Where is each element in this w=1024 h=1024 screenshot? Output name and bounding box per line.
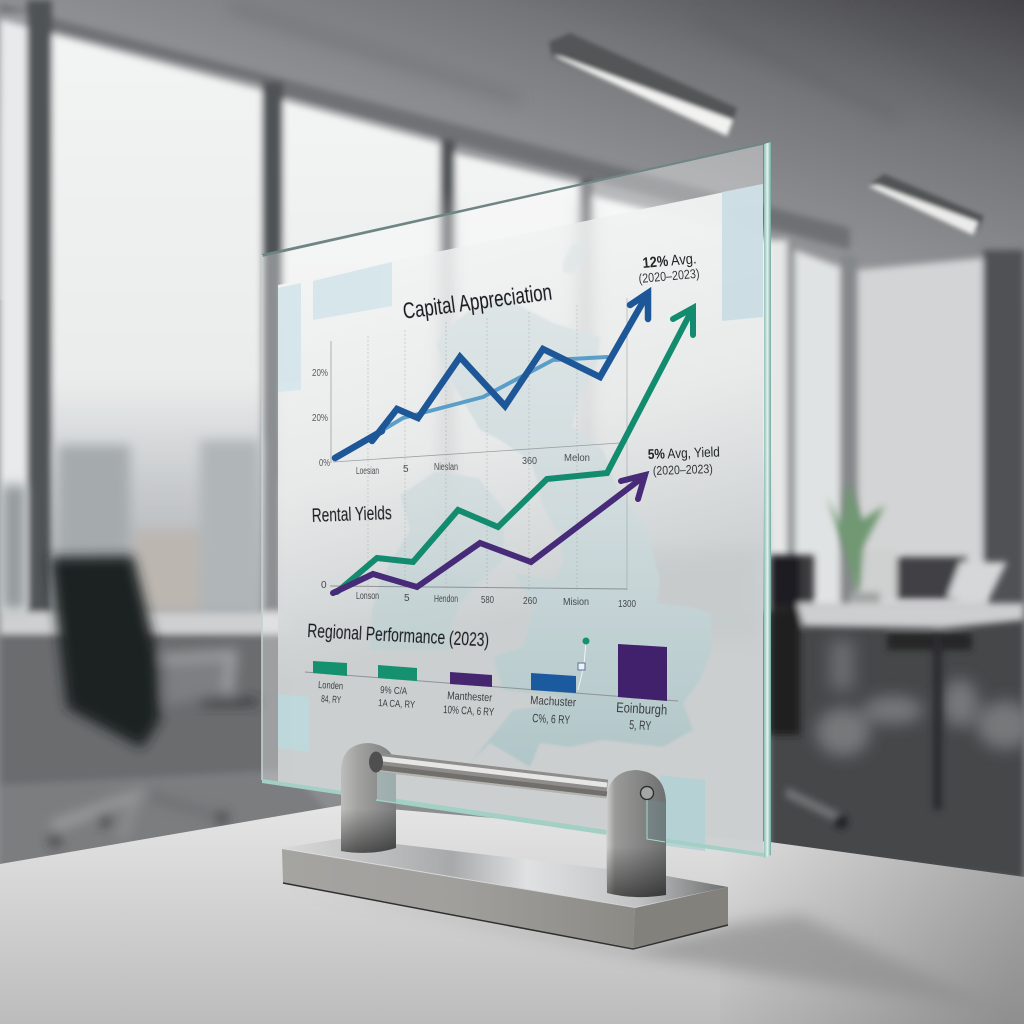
glass bottom edge xyxy=(262,779,764,857)
clear glass pane xyxy=(262,143,763,857)
glass left edge xyxy=(261,255,263,780)
x axis labels: 5 xyxy=(403,464,409,475)
x axis labels: 360 xyxy=(522,456,537,467)
ceiling light, near xyxy=(549,33,737,136)
green arrow line xyxy=(337,308,693,592)
y axis labels xyxy=(312,368,330,469)
desk chairs under desk xyxy=(816,640,1024,756)
axis labels: 580 xyxy=(481,595,494,606)
slot line xyxy=(647,800,665,842)
glass top edge xyxy=(262,141,771,257)
axis labels: 0 xyxy=(321,580,327,591)
office chair xyxy=(49,556,258,846)
distant city buildings xyxy=(2,440,438,610)
bar labels: 1A CA, RY xyxy=(378,698,416,711)
x axis labels: Melon xyxy=(564,453,590,464)
bar labels: C%, 6 RY xyxy=(532,711,571,727)
chart: rental yields xyxy=(311,308,720,610)
axis labels: Mision xyxy=(563,597,589,608)
axis line xyxy=(330,586,627,589)
axes and gridlines xyxy=(331,298,627,590)
window panes, left xyxy=(0,14,770,612)
desktop xyxy=(797,603,1024,628)
desk with chairs, laptop and plant xyxy=(770,480,1024,829)
right-hand chair xyxy=(770,555,814,605)
window frames xyxy=(0,0,850,625)
bar labels: Machuster xyxy=(530,693,577,709)
x axis labels: Nieslan xyxy=(434,462,458,473)
Northern isles xyxy=(563,243,587,274)
chair back and seat xyxy=(50,556,160,748)
right upright xyxy=(606,770,666,897)
stand shadow on table xyxy=(285,885,1000,1010)
glass right edge xyxy=(764,142,771,858)
bar labels: 84, RY xyxy=(321,694,342,706)
ceiling shading lines xyxy=(230,6,1024,120)
bar labels: Londen xyxy=(318,680,343,692)
chart: capital appreciation xyxy=(312,250,700,590)
bars xyxy=(313,644,667,701)
arm and base xyxy=(49,649,258,846)
bar labels: 9% C/A xyxy=(380,685,408,697)
y axis labels: 20% xyxy=(312,368,328,379)
axis labels: Hendon xyxy=(434,594,458,605)
base front face xyxy=(282,849,635,948)
left glass section in slot xyxy=(377,772,396,803)
laptop xyxy=(947,562,1007,603)
y axis labels: 20% xyxy=(312,413,328,424)
dark blue arrow line xyxy=(335,293,648,458)
decorative accent panels xyxy=(278,184,763,851)
callout: 12% average xyxy=(638,250,700,286)
x axis labels xyxy=(356,453,590,477)
tinted glass in right slot xyxy=(647,800,666,842)
frosted film xyxy=(278,184,763,853)
glass panel xyxy=(261,141,771,858)
UK map watermark xyxy=(370,243,713,767)
plant and vase xyxy=(827,480,885,590)
heading: Regional Performance (2023): Regional Performance (2023) xyxy=(307,621,490,652)
table surface xyxy=(0,805,1024,1024)
pivot bolt xyxy=(640,786,654,800)
baseline xyxy=(305,672,678,701)
axis labels: 5 xyxy=(404,593,410,604)
base top surface xyxy=(282,838,728,907)
y axis labels: 0% xyxy=(319,458,330,469)
bar labels: Eoinburgh xyxy=(616,699,668,718)
callout: 12% average: (2020–2023) xyxy=(638,266,700,286)
axis labels xyxy=(321,580,636,610)
callout: 5% average yield: 5% Avg, Yield xyxy=(648,443,720,462)
axis labels: 1300 xyxy=(618,599,636,610)
callout: 5% average yield: (2020–2023) xyxy=(653,462,713,478)
metal stand xyxy=(282,743,728,949)
x axis labels: Loesian xyxy=(356,466,379,477)
heading: Capital Appreciation: Capital Appreciation xyxy=(401,279,553,324)
bar labels: 5, RY xyxy=(629,717,652,733)
rod xyxy=(375,758,607,798)
callout: 5% average yield xyxy=(648,443,720,478)
map marker xyxy=(578,638,590,690)
base bottom shadow line xyxy=(283,883,728,949)
Great Britain xyxy=(437,297,713,767)
bar labels xyxy=(318,680,668,733)
ceiling xyxy=(0,0,1024,300)
light blue trend line xyxy=(337,357,607,457)
chart: regional performance bars xyxy=(305,621,678,733)
soft reflected window streaks xyxy=(440,200,760,640)
bar labels: 10% CA, 6 RY xyxy=(443,704,495,719)
glass edge between uprights xyxy=(376,800,606,834)
Ireland xyxy=(370,472,505,650)
ceiling light, far xyxy=(868,174,984,235)
axis labels: Lonson xyxy=(356,591,379,602)
heading: Rental Yields: Rental Yields xyxy=(311,503,392,527)
back wall and floor, left xyxy=(0,612,345,880)
callout: 12% average: 12% Avg. xyxy=(642,250,697,272)
bar labels: Manthester xyxy=(447,690,493,704)
back floor, right xyxy=(770,610,1024,880)
left upright xyxy=(341,743,396,853)
base right face xyxy=(633,887,728,948)
far room, right xyxy=(770,240,1024,610)
rod end cap xyxy=(369,752,383,772)
axis labels: 260 xyxy=(523,596,537,607)
purple arrow line xyxy=(333,475,645,593)
